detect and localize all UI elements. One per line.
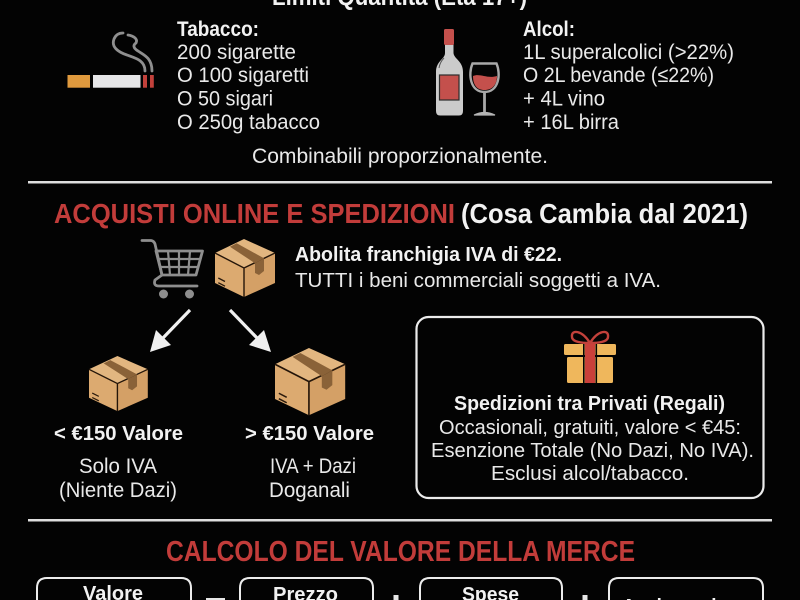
text block: under 150 euro: < €150 Valore <box>54 422 183 445</box>
heading: online purchases: ACQUISTI ONLINE E SPEDIZIONI <box>54 198 455 229</box>
text block: VAT exemption abolished: Abolita franchigia IVA di €22. <box>295 243 562 266</box>
text block: over 150 euro: > €150 Valore <box>245 422 374 445</box>
arrow: to over 150 euro <box>230 310 271 352</box>
box: value <box>37 578 191 600</box>
text block: under 150 euro: Solo IVA <box>79 455 157 478</box>
text block: tobacco limits: O 250g tabacco <box>177 111 320 134</box>
text block: VAT exemption abolished: TUTTI i beni commerciali soggetti a IVA. <box>295 269 661 292</box>
heading: online purchases <box>54 198 748 229</box>
text block: tobacco limits: O 50 sigari <box>177 88 273 110</box>
text block: over 150 euro: Doganali <box>269 479 350 502</box>
icon: parcel <box>215 239 275 297</box>
text: panel body: Spedizioni tra Privati (Regali) <box>454 392 725 415</box>
icon: large parcel <box>275 348 345 415</box>
text block: under 150 euro <box>54 422 183 502</box>
heading: goods value calculation: CALCOLO DEL VALORE DELLA MERCE <box>166 536 635 568</box>
text block: VAT exemption abolished <box>295 243 661 292</box>
icon: shopping cart <box>142 240 202 298</box>
box: insurance <box>609 578 763 600</box>
box: price <box>240 578 373 600</box>
heading: online purchases: (Cosa Cambia dal 2021) <box>461 198 748 229</box>
text block: alcohol limits: + 16L birra <box>523 111 619 134</box>
text block: alcohol limits: + 4L vino <box>523 88 605 110</box>
operator: equals <box>206 598 225 600</box>
text block: tobacco limits: O 100 sigaretti <box>177 64 309 87</box>
icon: small parcel <box>89 356 148 411</box>
text: panel body <box>431 392 754 485</box>
formula: value equation <box>37 578 763 600</box>
operator: plus <box>394 595 398 600</box>
text block: under 150 euro: (Niente Dazi) <box>59 479 177 502</box>
text block: over 150 euro <box>245 422 374 502</box>
text block: over 150 euro: IVA + Dazi <box>270 455 356 478</box>
text: panel body: Esenzione Totale (No Dazi, No IVA). <box>431 439 754 462</box>
text block: alcohol limits <box>523 18 734 134</box>
box: shipping costs <box>420 578 562 600</box>
icon: wine bottle and glass <box>436 29 499 116</box>
icon: gift <box>564 332 616 383</box>
text block: tobacco limits <box>177 18 320 134</box>
operator: plus <box>582 595 588 600</box>
text block: alcohol limits: 1L superalcolici (>22%) <box>523 41 734 64</box>
panel: private shipments <box>416 317 764 498</box>
text block: alcohol limits: O 2L bevande (≤22%) <box>523 64 714 87</box>
text block: alcohol limits: Alcol: <box>523 18 575 41</box>
text block: tobacco limits: 200 sigarette <box>177 41 296 64</box>
icon: cigarette <box>68 33 154 88</box>
arrow: to under 150 euro <box>150 310 190 352</box>
text block: tobacco limits: Tabacco: <box>177 18 259 41</box>
text: panel body: Esclusi alcol/tabacco. <box>491 462 689 485</box>
note: combinable proportionally: Combinabili proporzionalmente. <box>252 145 548 168</box>
text: panel body: Occasionali, gratuiti, valore < €45: <box>439 416 741 439</box>
